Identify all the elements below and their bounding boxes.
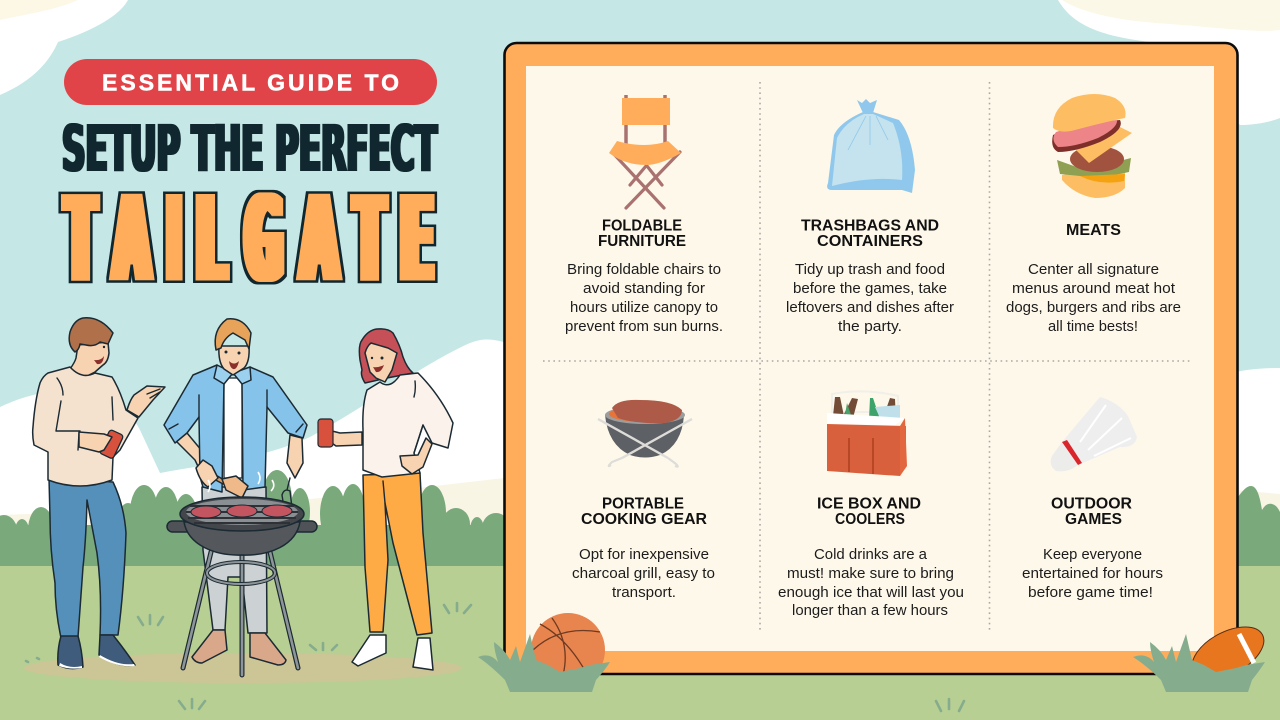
description: before the games, take	[793, 280, 947, 297]
infographic panel	[504, 43, 1238, 674]
bowl	[184, 522, 300, 555]
icon: cooler with drinks	[827, 391, 907, 476]
cream card	[526, 66, 1214, 651]
orange trousers	[363, 473, 432, 635]
card: meats	[1006, 222, 1181, 335]
headline: Tailgate: L	[197, 172, 226, 310]
description: longer than a few hours	[792, 602, 948, 619]
fork	[282, 478, 292, 508]
heading: COOLERS	[835, 511, 905, 528]
steam	[208, 472, 274, 492]
heading: TRASHBAGS AND	[801, 218, 939, 234]
description: Opt for inexpensive	[579, 546, 709, 563]
spatula	[212, 474, 224, 484]
description	[565, 261, 723, 335]
heading: COOKING GEAR	[581, 511, 707, 528]
neck and head	[219, 346, 249, 375]
headline: Tailgate: T	[66, 172, 95, 310]
card: foldable furniture	[565, 218, 723, 335]
person: man in blue shirt grilling	[164, 319, 307, 665]
description	[778, 546, 964, 619]
head	[70, 342, 109, 378]
description	[786, 261, 954, 335]
description: Bring foldable chairs to	[567, 261, 721, 278]
arm with can	[329, 431, 362, 446]
description: entertained for hours	[1022, 565, 1163, 582]
icon: folding chair	[609, 95, 681, 208]
description	[1022, 546, 1163, 601]
description	[1006, 261, 1181, 335]
description: Keep everyone	[1043, 546, 1142, 563]
icon: shuttlecock	[1051, 397, 1137, 471]
football in grass	[1133, 616, 1272, 692]
icon: trash bag	[827, 99, 915, 193]
heading: CONTAINERS	[817, 233, 923, 250]
headline: Tailgate	[66, 172, 433, 310]
legs	[183, 552, 298, 675]
title pill: Essential Guide To: ESSENTIAL GUIDE TO	[102, 70, 399, 96]
headline: Tailgate: T	[355, 172, 384, 310]
headline: Tailgate: I	[168, 172, 180, 310]
rim and grate	[180, 497, 304, 531]
heading	[581, 496, 707, 528]
headline: Tailgate: G	[246, 172, 282, 310]
description: the party.	[838, 318, 902, 335]
orange frame	[504, 43, 1238, 674]
heading	[817, 496, 921, 528]
jeans	[49, 478, 126, 638]
headline: Tailgate: A	[114, 172, 149, 310]
heading: ICE BOX AND	[817, 496, 921, 512]
description	[572, 546, 715, 601]
hair	[359, 329, 413, 383]
forearms	[175, 433, 303, 478]
description: Tidy up trash and food	[795, 261, 945, 278]
shoes	[58, 635, 135, 669]
description: avoid standing for	[583, 280, 705, 297]
description: charcoal grill, easy to	[572, 565, 715, 582]
heading: FOLDABLE	[602, 218, 682, 234]
ground patch	[24, 653, 462, 683]
heading	[598, 218, 686, 250]
face	[365, 343, 397, 382]
headline: Setup the Perfect: SETUP THE PERFECT	[62, 112, 437, 186]
description: menus around meat hot	[1012, 280, 1176, 297]
raised hand	[127, 386, 165, 417]
description: dogs, burgers and ribs are	[1006, 299, 1181, 316]
person: man in beige sweater	[33, 318, 165, 669]
description: prevent from sun burns.	[565, 318, 723, 335]
description: Cold drinks are a	[814, 546, 928, 563]
card: portable cooking gear	[572, 496, 715, 601]
description: all time bests!	[1048, 318, 1138, 335]
handles	[167, 521, 193, 532]
description: must! make sure to bring	[787, 565, 954, 582]
white shoes	[352, 635, 433, 670]
sweater	[33, 367, 138, 486]
heading: FURNITURE	[598, 233, 686, 250]
can and hand	[99, 429, 124, 459]
card: trashbags and containers	[786, 218, 954, 335]
description: Center all signature	[1028, 261, 1159, 278]
hand on hip	[400, 438, 432, 474]
blue shirt	[164, 365, 307, 492]
icon: burger	[1052, 94, 1132, 198]
card: outdoor games	[1022, 496, 1163, 601]
description: before game time!	[1028, 584, 1153, 601]
burger patties	[191, 506, 221, 518]
grass tufts	[26, 603, 964, 711]
heading	[801, 218, 939, 250]
charcoal grill	[167, 497, 317, 675]
description: hours utilize canopy to	[570, 299, 718, 316]
description: enough ice that will last you	[778, 584, 964, 601]
text: E	[401, 172, 433, 310]
heading: PORTABLE	[602, 496, 684, 512]
heading: MEATS	[1066, 222, 1121, 239]
white t-shirt	[224, 378, 242, 478]
description: transport.	[612, 584, 676, 601]
icon: portable grill	[598, 400, 692, 467]
heading	[1051, 496, 1132, 528]
white sweater	[363, 373, 453, 477]
title pill: Essential Guide To	[64, 59, 437, 105]
basketball in grass	[478, 613, 610, 692]
heading: OUTDOOR	[1051, 496, 1132, 512]
headline: Tailgate: A	[301, 172, 338, 310]
tan shoes	[192, 630, 286, 665]
description: leftovers and dishes after	[786, 299, 954, 316]
heading: GAMES	[1065, 511, 1122, 528]
person: woman in white sweater	[318, 329, 453, 670]
card: ice box and coolers	[778, 496, 964, 619]
grey trousers	[202, 487, 267, 633]
